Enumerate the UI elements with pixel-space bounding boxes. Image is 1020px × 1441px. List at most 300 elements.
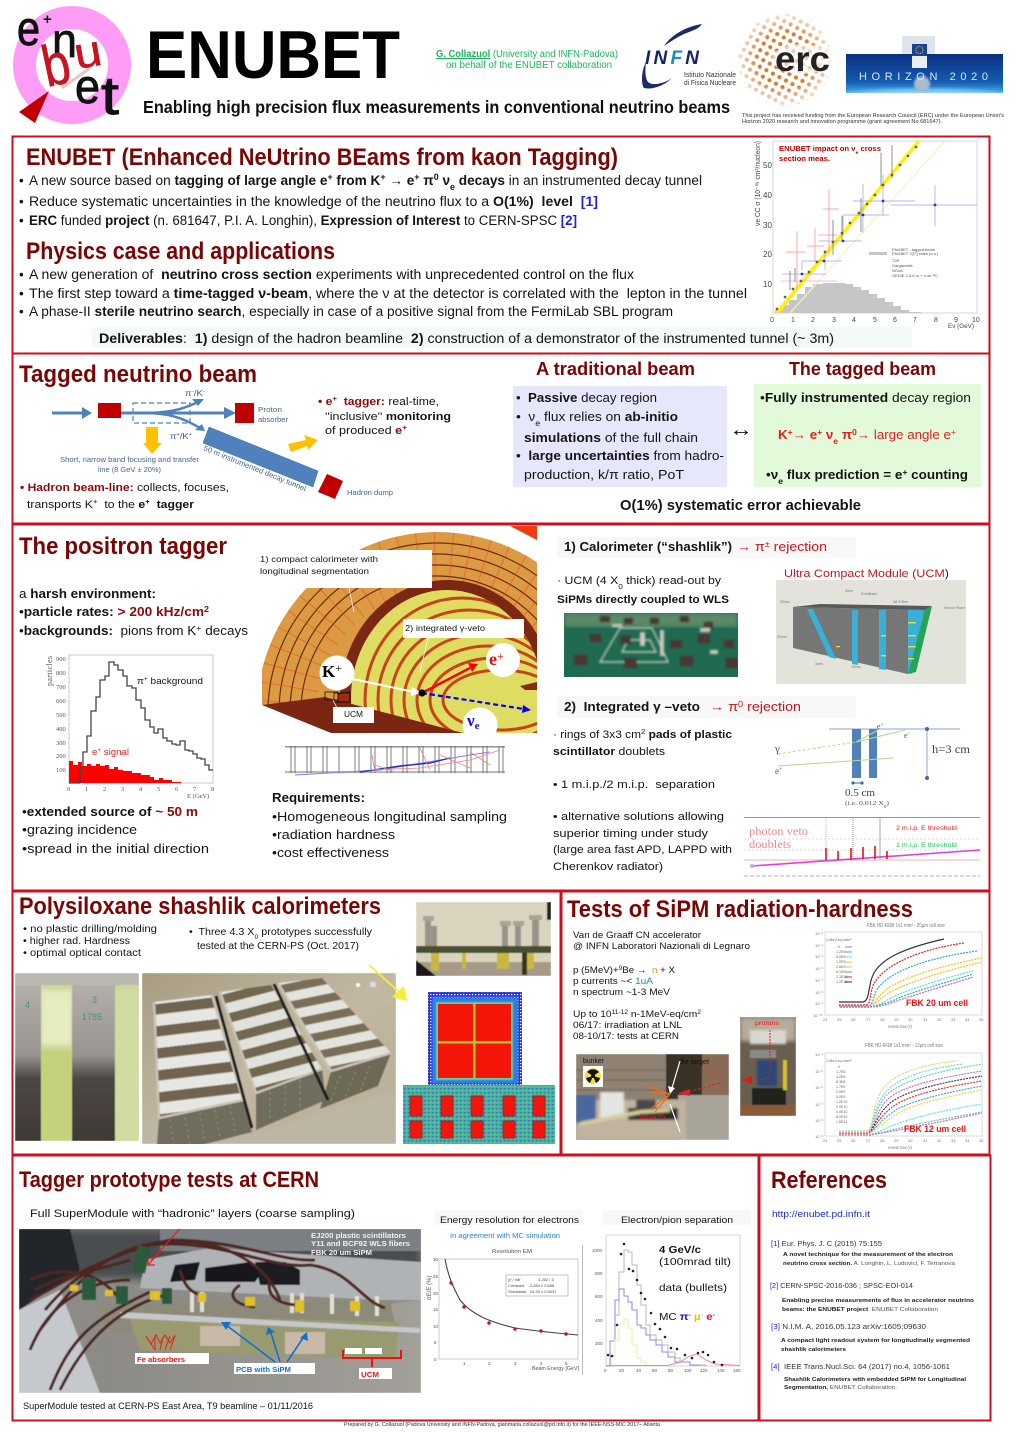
- logo: ENUBET: b: [36, 31, 76, 100]
- funding note: This project has received funding from the European Research Council (ERC) under the European Union's: [742, 113, 1004, 119]
- chart: FBK 20 um cell: 26: [851, 1017, 856, 1022]
- bullet list: project: •: [19, 213, 24, 228]
- chart: FBK 12 um cell: 0: [838, 1065, 840, 1069]
- heading: Tagged neutrino beam: [19, 361, 257, 388]
- chart: electron pion separation: 800: [595, 1271, 603, 1276]
- reference 2: [770, 1283, 975, 1313]
- label: UCM: UCM: [344, 710, 363, 719]
- text: veto description: • 1 m.i.p./2 m.i.p. separation: [553, 779, 715, 791]
- logo: ENUBET: e: [75, 61, 100, 114]
- logo: ERC: [735, 12, 835, 108]
- box: traditional beam: production, k/π ratio, PoT: [524, 468, 684, 482]
- photo: protons beam line: [740, 1017, 796, 1116]
- panel: polysiloxane calorimeters: [12, 892, 560, 1157]
- chart: FBK 20 um cell: 34: [965, 1017, 970, 1022]
- photo: scintillator tiles: [15, 973, 139, 1141]
- photo: SuperModule: FBK 20 um SiPM: [311, 1248, 372, 1257]
- decay arrows: [320, 643, 531, 732]
- subheading: gamma veto: [557, 696, 856, 718]
- panel: positron tagger: [12, 524, 990, 892]
- heading: The positron tagger: [19, 533, 227, 560]
- chart: particle energy histogram: 800: [56, 670, 66, 677]
- chart: FBK 12 um cell: 1.7E8: [836, 1070, 845, 1074]
- box: traditional beam: • large uncertainties from hadro-: [516, 449, 724, 463]
- chart: FBK 12 um cell: 34: [965, 1138, 970, 1143]
- text: irradiation setup: Van de Graaff CN accelerator: [573, 930, 701, 940]
- text: harsh environment: •particle rates: > 200 kHz/cm 2: [19, 604, 210, 619]
- chart: FBK 20 um cell: 1.2E11: [836, 980, 847, 984]
- reference 4: [4] IEEE Trans.Nucl.Sci. 64 (2017) no.4, 1056-1061: [771, 1364, 950, 1371]
- chart: FBK 12 um cell: 10⁻⁵: [815, 1069, 824, 1074]
- chart: photon veto doublets signal: doublets: [749, 839, 792, 851]
- logo: ENUBET: t: [101, 66, 119, 126]
- chart: particle energy histogram: 1: [85, 786, 88, 793]
- bullet list: physics: The first step toward a time-tagged ν-beam , where the ν at the detector is correlated with the lepton in the tunnel: [29, 286, 747, 301]
- chart: FBK 12 um cell: 1.6E11: [836, 1120, 847, 1124]
- heading: tagged beam: The tagged beam: [789, 358, 936, 379]
- chart: cross section vs energy: Eν (GeV): [948, 323, 974, 330]
- chart: FBK 12 um cell: 30: [908, 1138, 913, 1143]
- panel: introduction: [12, 136, 990, 354]
- label: integrated veto: 2) integrated γ-veto: [405, 623, 485, 633]
- decay arrows: e: [489, 649, 497, 669]
- chart: cross section vs energy: section meas.: [779, 154, 830, 163]
- chart: cross section vs energy: 8: [934, 317, 938, 324]
- text: veto description: superior timing under study: [553, 828, 708, 840]
- text: UCM readout: SiPMs directly coupled to WLS: [557, 594, 730, 606]
- chart: particle energy histogram: π+ background: [137, 676, 203, 687]
- chart: FBK 12 um cell: 29: [894, 1138, 899, 1143]
- chart: FBK 20 um cell: 1.2E9: [836, 960, 845, 964]
- chart: FBK 20 um cell: 6.1E9: [836, 970, 845, 974]
- illustration: Ultra Compact Module: 3mm: [845, 589, 853, 593]
- chart: photon veto doublets signal: [744, 818, 980, 876]
- diagram: photon veto doublet: γ: [774, 743, 780, 755]
- bullet list: project: Reduce systematic uncertainties in the knowledge of the neutrino flux to a O(1%) level [1]: [29, 194, 598, 209]
- bullet list: advantages: [23, 924, 157, 959]
- panel: references: [760, 1156, 990, 1420]
- deliverables box: [92, 327, 912, 348]
- reference 1: [771, 1241, 956, 1267]
- text: irradiation setup: Up to 10 11-12 n-1MeV-eq/cm 2: [573, 1009, 702, 1019]
- chart: particle energy histogram: [45, 655, 214, 800]
- diagram: photon veto doublet: h=3 cm: [932, 742, 971, 756]
- beamline diagram: absorber: [258, 415, 289, 424]
- text: prototypes: [189, 927, 372, 952]
- chart: FBK 12 um cell: 33: [951, 1138, 956, 1143]
- chart: particle energy histogram: 400: [56, 726, 66, 733]
- chart: particle energy histogram: 8: [211, 786, 214, 793]
- chart: electron pion separation: 80: [668, 1368, 674, 1373]
- logo: ERC: erc: [775, 40, 830, 79]
- chart: cross section vs energy: 4: [852, 317, 856, 324]
- text: prototypes: • Three 4.3 X 0 prototypes successfully: [189, 927, 372, 940]
- chart: FBK 12 um cell: 35: [979, 1138, 984, 1143]
- chart: FBK 20 um cell: 31: [923, 1017, 928, 1022]
- box: traditional beam: • Passive decay region: [516, 391, 657, 405]
- illustration: Ultra Compact Module: [776, 580, 966, 684]
- chart: electron pion separation: 140: [717, 1368, 725, 1373]
- heading: electron pion separation: [603, 1210, 751, 1225]
- heading: Polysiloxane shashlik calorimeters: [19, 893, 381, 920]
- chart: electron pion separation: (100mrad tilt): [659, 1257, 731, 1268]
- subheading: calorimeter: 1) Calorimeter (“shashlik”): [564, 540, 732, 554]
- text: e+ tagger: [318, 394, 451, 437]
- label: compact calorimeter: longitudinal segmentation: [260, 566, 369, 576]
- bullet list: project: ERC funded project (n. 681647, P.I. A. Longhin), Expression of Interest to CERN-SPSC [2]: [29, 213, 577, 228]
- text: source properties: [22, 805, 209, 856]
- box: tagged beam: K+→ e+ νe π0→ large angle e +: [778, 428, 956, 446]
- chart: particle energy histogram: 900: [56, 656, 66, 663]
- text: veto description: [553, 726, 732, 873]
- text: harsh environment: •backgrounds: pions from K + decays: [19, 624, 248, 638]
- box: traditional beam: [513, 386, 727, 487]
- text: veto description: Cherenkov radiator): [553, 861, 663, 873]
- text: source properties: •spread in the initial direction: [22, 842, 209, 856]
- text: source properties: •grazing incidence: [22, 823, 137, 837]
- funding note: Horizon 2020 research and innovation programme (grant agreement No 681647).: [742, 119, 942, 125]
- chart: particle energy histogram: 7: [193, 786, 197, 793]
- chart: energy resolution: 30: [433, 1257, 439, 1262]
- chart: electron pion separation: 160: [733, 1368, 741, 1373]
- illustration: Ultra Compact Module: 3mm: [815, 662, 823, 666]
- chart: energy resolution: 5: [565, 1361, 568, 1366]
- logo: INFN: [642, 24, 736, 89]
- text: hadron beam-line: [20, 482, 229, 511]
- chart: cross section vs energy: 3: [832, 317, 836, 324]
- heading: physics case: Physics case and applications: [26, 238, 335, 265]
- heading: Tests of SiPM radiation-hardness: [567, 896, 913, 923]
- chart: FBK 12 um cell: 28: [880, 1138, 885, 1143]
- heading: electron pion separation: Electron/pion separation: [621, 1215, 733, 1225]
- chart: FBK 20 um cell: 25: [837, 1017, 842, 1022]
- chart: particle energy histogram: 500: [56, 712, 66, 719]
- chart: electron pion separation: [592, 1235, 741, 1373]
- text: hadron beam-line: transports K + to the e+ tagger: [27, 496, 195, 511]
- chart: electron pion separation: 400: [595, 1318, 603, 1323]
- reference 1: A novel technique for the measurement of the electron: [783, 1252, 954, 1258]
- chart: FBK 12 um cell: 4.0E10: [836, 1110, 847, 1114]
- beamline diagram: π-/K-: [185, 388, 205, 398]
- chart: energy resolution: 5: [434, 1340, 437, 1345]
- reference 1: neutrino cross section. A. Longhin, L. Ludovici, F. Terranova: [783, 1261, 956, 1267]
- text: veto description: (large area fast APD, LAPPD with: [553, 844, 732, 856]
- subheading: calorimeter: → π ± rejection: [737, 540, 827, 554]
- illustration: Ultra Compact Module: 30mm: [780, 600, 790, 604]
- beamline diagram: line (8 GeV ± 20%): [98, 465, 161, 474]
- text: veto description: • alternative solutions allowing: [553, 811, 724, 823]
- photo: bunker: Sensor (?): [639, 1114, 665, 1121]
- chart: cross section vs energy: 2: [811, 317, 815, 324]
- arrow: to beam map: [369, 965, 407, 1001]
- chart: cross section vs energy: νe CC σ (10⁻³⁹ cm²/nucleon): [755, 141, 762, 226]
- chart: FBK 12 um cell: 32: [937, 1138, 942, 1143]
- beamline diagram: Hadron dump: [347, 488, 393, 497]
- reference 2: [2] CERN-SPSC-2016-036 ; SPSC-EOI-014: [770, 1283, 913, 1290]
- chart: FBK 20 um cell: 1-MeV-eq n/cm²: [826, 938, 852, 942]
- chart: FBK 20 um cell: 10⁻⁶: [815, 966, 824, 971]
- chart: FBK 20 um cell: reverse bias (V): [888, 1024, 912, 1029]
- chart: FBK 12 um cell: 10⁻⁶: [815, 1085, 824, 1090]
- text: irradiation setup: @ INFN Laboratori Nazionali di Legnaro: [573, 941, 750, 951]
- chart: FBK 12 um cell: FBK 12 um cell: [904, 1124, 966, 1134]
- box: tagged beam: [754, 384, 981, 487]
- chart: cross section vs energy: 6: [893, 317, 897, 324]
- text: irradiation setup: 06/17: irradiation at LNL: [573, 1020, 682, 1030]
- logo: ENUBET: u: [70, 26, 105, 79]
- chart: cross section vs energy: 10: [972, 317, 980, 324]
- text: hadron beam-line: • Hadron beam-line: collects, focuses,: [20, 482, 229, 494]
- logo: ENUBET: +: [43, 11, 52, 28]
- chart: FBK 20 um cell: 10⁻⁸: [815, 990, 824, 995]
- photo: SuperModule: [19, 1223, 421, 1393]
- chart: electron pion separation: 4 GeV/c: [659, 1245, 701, 1256]
- photo: bunker: bunker: [583, 1058, 605, 1065]
- chart: FBK 20 um cell: 10⁻⁵: [815, 954, 824, 959]
- heading: energy resolution: [435, 1210, 583, 1225]
- photo: bunker: [576, 1054, 729, 1140]
- beamline diagram: 50 m instrumented decay tunnel: [202, 444, 308, 493]
- bullet list: project: •: [19, 173, 24, 188]
- chart: FBK 12 um cell: 8.0E10: [836, 1115, 847, 1119]
- diagram: photon veto doublet: e-: [904, 731, 910, 740]
- chart: cross section vs energy: 9: [954, 317, 958, 324]
- chart: FBK 20 um cell: 10⁻⁴: [815, 943, 824, 948]
- bullet list: physics: •: [19, 267, 24, 282]
- bullet list: physics: A phase-II sterile neutrino search, especially in case of a positive signal from the FermiLab SBL program: [29, 304, 673, 319]
- chart: FBK 12 um cell: reverse bias (V): [888, 1145, 912, 1150]
- chart: cross section vs energy: GENIE 2.8.6 νₑ + n on ¹²C: [892, 273, 938, 278]
- logo: INFN: Istituto Nazionale: [684, 72, 736, 79]
- chart: FBK 20 um cell: 10⁻⁹: [815, 1001, 824, 1006]
- chart: particle energy histogram: 3: [121, 786, 124, 793]
- funding note: [742, 113, 1004, 125]
- decay arrows: ν: [467, 711, 475, 730]
- bullet list: project: A new source based on tagging of large angle e+ from K+ → e+ π0 νe decays in an instrumented decay tunnel: [29, 172, 702, 192]
- logo: INFN: INFN: [645, 48, 700, 69]
- box: traditional beam: • νe flux relies on ab-initio: [516, 410, 678, 428]
- chart: energy resolution: [427, 1249, 579, 1372]
- reference 2: Enabling precise measurements of flux in accelerator neutrino: [782, 1298, 975, 1304]
- authors: G. Collazuol (University and INFN-Padova): [436, 49, 618, 60]
- chart: particle energy histogram: 6: [175, 786, 179, 793]
- heat map: module efficiency: [428, 992, 522, 1089]
- arrow: versus: ↔: [729, 419, 753, 441]
- chart: particle energy histogram: 100: [56, 767, 66, 774]
- chart: FBK 12 um cell: 25: [837, 1138, 842, 1143]
- chart: FBK 12 um cell: 8.3E8: [836, 1080, 845, 1084]
- photo: bunker: Be target: [680, 1059, 709, 1066]
- authors: on behalf of the ENUBET collaboration: [446, 60, 612, 71]
- chart: electron pion separation: MC π- µ- e-: [659, 1312, 715, 1323]
- chart: energy resolution: 2: [488, 1361, 491, 1366]
- chart: FBK 20 um cell: 32: [937, 1017, 942, 1022]
- chart: FBK 20 um cell: 5.0E9: [836, 955, 845, 959]
- chart: FBK 12 um cell: 1.7E9: [836, 1085, 845, 1089]
- chart: particle energy histogram: 300: [56, 740, 66, 747]
- caption: supermodule: Full SuperModule with “hadronic” layers (coarse sampling): [30, 1208, 355, 1220]
- subheading: gamma veto: 2) Integrated γ –veto: [564, 700, 700, 714]
- beamline diagram: π+/K+: [170, 431, 192, 441]
- chart: electron pion separation: data (bullets): [659, 1283, 727, 1294]
- text: irradiation setup: p currents ~< 1uA: [573, 976, 654, 986]
- chart: cross section vs energy: [755, 141, 980, 330]
- decay arrows: e: [475, 720, 480, 732]
- photo: scintillator tiles: 1785: [82, 1012, 102, 1022]
- chart: cross section vs energy: 20: [763, 250, 772, 259]
- reference 3: A compact light readout system for longitudinally segmented: [781, 1338, 970, 1344]
- chart: FBK 20 um cell: 27: [866, 1017, 871, 1022]
- logo: Horizon 2020: [846, 36, 1003, 93]
- label: integrated veto: [403, 619, 524, 638]
- chart: FBK 12 um cell: 1-MeV-eq n/cm²: [826, 1059, 852, 1063]
- decay arrows: +: [497, 649, 504, 663]
- diagram: photon veto doublet: 0.5 cm: [845, 788, 875, 799]
- note: MC agreement: In agreement with MC simulation: [450, 1231, 560, 1240]
- text: requirements: [272, 791, 507, 860]
- heading: Tagger prototype tests at CERN: [19, 1167, 319, 1192]
- chart: cross section vs energy: 40: [763, 191, 772, 200]
- logo: Horizon 2020: HORIZON 2020: [859, 71, 988, 83]
- bullet list: physics: [19, 267, 747, 319]
- text: veto description: · rings of 3x3 cm 2 pads of plastic: [553, 726, 732, 741]
- chart: FBK 12 um cell: 10⁻⁸: [815, 1118, 824, 1123]
- chart: energy resolution: 20: [433, 1291, 439, 1296]
- text: requirements: •cost effectiveness: [272, 846, 389, 860]
- beamline diagram: [52, 388, 393, 499]
- chart: FBK 12 um cell: 10⁻⁹: [815, 1134, 824, 1139]
- chart: particle energy histogram: particles: [45, 656, 54, 686]
- chart: energy resolution: 10: [433, 1324, 439, 1329]
- reference 3: [3] N.I.M. A, 2016.05.123 arXiv:1605:09630: [771, 1324, 926, 1331]
- illustration: Ultra Compact Module: 30mm: [777, 635, 787, 639]
- chart: FBK 20 um cell: 24: [823, 1017, 828, 1022]
- reference 4: Shashlik Calorimeters with embedded SiPM for Longitudinal: [784, 1377, 966, 1383]
- chart: photon veto doublets signal: photon veto: [749, 826, 808, 838]
- chart: electron pion separation: 40: [636, 1368, 642, 1373]
- chart: particle energy histogram: 4: [139, 786, 143, 793]
- chart: particle energy histogram: e+ signal: [92, 746, 129, 758]
- chart: photon veto doublets signal: 1 m.i.p. E threshold: [896, 842, 957, 849]
- text: harsh environment: a harsh environment:: [19, 587, 156, 601]
- deliverables box: Deliverables : 1) design of the hadron beamline 2) construction of a demonstrator of the instrumented tunnel (~ 3m): [99, 331, 834, 346]
- title: ENUBET: [146, 17, 400, 93]
- heat map: tile hits: [403, 1085, 555, 1144]
- logo: INFN: di Fisica Nucleare: [684, 80, 736, 87]
- chart: FBK 20 um cell: 10⁻³: [815, 931, 824, 936]
- chart: FBK 12 um cell: 26: [851, 1138, 856, 1143]
- text: UCM readout: · UCM (4 X 0 thick) read-out by: [557, 575, 721, 590]
- chart: cross section vs energy: 5: [873, 317, 877, 324]
- logo: ENUBET: e: [17, 3, 40, 56]
- reference 3: [771, 1324, 970, 1353]
- label: Fe absorbers: Fe absorbers: [137, 1355, 185, 1364]
- box: tagged beam: •νe flux prediction = e + counting: [766, 468, 968, 486]
- chart: FBK 12 um cell: 10⁻⁷: [815, 1102, 824, 1107]
- label: PCB with SiPM: PCB with SiPM: [236, 1365, 291, 1374]
- beamline diagram: Proton: [258, 405, 282, 414]
- text: harsh environment: [19, 587, 248, 638]
- label: Fe absorbers: [135, 1353, 209, 1364]
- chart: cross section vs energy: 50: [763, 161, 772, 170]
- chart: cross section vs energy: ENUBET - tagged beam: [892, 247, 936, 252]
- photo: fibers and screws: [416, 902, 551, 976]
- decay arrows: +: [335, 661, 342, 675]
- diagram: photon veto doublet: [774, 722, 971, 808]
- chart: energy resolution: 4: [540, 1361, 543, 1366]
- text: requirements: Requirements:: [272, 791, 365, 805]
- chart: FBK 12 um cell: 5.0E9: [836, 1095, 845, 1099]
- bullet list: advantages: • optimal optical contact: [23, 948, 141, 959]
- conclusion: O(1%) systematic error achievable: [620, 497, 861, 514]
- chart: FBK 12 um cell: 27: [866, 1138, 871, 1143]
- text: e+ tagger: • e+ tagger: real-time,: [318, 394, 439, 408]
- text: e+ tagger: of produced e+: [325, 422, 407, 437]
- chart: cross section vs energy: ENUBET impact on ν e cross: [779, 144, 881, 156]
- heading: ENUBET: ENUBET (Enhanced NeUtrino BEams from kaon Tagging): [26, 144, 618, 171]
- chart: energy resolution: χ² / ndf 4.252 / 3: [508, 1277, 554, 1282]
- panel: SiPM radiation hardness: [562, 892, 990, 1154]
- text: irradiation setup: 08-10/17: tests at CERN: [573, 1031, 679, 1041]
- text: source properties: •extended source of ~ 50 m: [22, 805, 198, 819]
- chart: electron pion separation: 120: [700, 1368, 708, 1373]
- chart: particle energy histogram: 2: [103, 786, 106, 793]
- text: requirements: •Homogeneous longitudinal sampling: [272, 810, 507, 824]
- box: traditional beam: simulations of the full chain: [524, 431, 698, 445]
- photo: SuperModule: EJ200 plastic scintillators: [311, 1231, 406, 1240]
- illustration: Ultra Compact Module: Scintillator: [861, 592, 878, 596]
- chart: particle energy histogram: 200: [56, 753, 66, 760]
- illustration: shower event display: [285, 746, 505, 775]
- chart: FBK 20 um cell: 10⁻¹⁰: [813, 1013, 823, 1018]
- text: e+ tagger: ''inclusive'' monitoring: [325, 411, 451, 423]
- text: irradiation setup: [573, 930, 750, 1041]
- chart: electron pion separation: 200: [595, 1341, 603, 1346]
- subheading: calorimeter: [557, 537, 856, 558]
- text: veto description: scintillator doublets: [553, 746, 665, 758]
- chart: FBK 20 um cell: 0: [838, 945, 840, 949]
- photo: SiPM board: [564, 613, 738, 677]
- text: UCM readout: [557, 575, 730, 606]
- chart: particle energy histogram: 700: [56, 684, 66, 691]
- module title: Ultra Compact Module (UCM ): [784, 568, 949, 580]
- label: UCM: [359, 1368, 392, 1379]
- chart: cross section vs energy: T2K: [892, 258, 900, 263]
- chart: cross section vs energy: 10: [763, 280, 772, 289]
- text: irradiation setup: n spectrum ~1-3 MeV: [573, 987, 671, 997]
- authors: [436, 49, 618, 71]
- footer credit: Prepared by G. Collazuol (Padova University and INFN-Padova, gianmaria.collazuol@pd.infn.it) for the IEEE-NSS-MIC 2017– Atlanta: [344, 1422, 660, 1428]
- text: prototypes: tested at the CERN-PS (Oct. 2017): [197, 941, 359, 952]
- chart: FBK 12 um cell: 4.2E8: [836, 1075, 845, 1079]
- bullet list: advantages: • higher rad. Hardness: [23, 936, 130, 947]
- chart: cross section vs energy: NOvA: [892, 268, 903, 273]
- chart: FBK 20 um cell: 1.2E9: [836, 950, 845, 954]
- chart: cross section vs energy: 1: [791, 317, 795, 324]
- label: UCM: UCM: [361, 1370, 379, 1379]
- chart: FBK 20 um cell: 2.6E9: [836, 965, 845, 969]
- chart: FBK 20 um cell: 30: [908, 1017, 913, 1022]
- chart: energy resolution: Resolution EM: [492, 1249, 532, 1255]
- decay arrows: K: [322, 662, 335, 681]
- box: tagged beam: •Fully instrumented decay region: [760, 391, 971, 405]
- subheading: gamma veto: → π 0 rejection: [710, 700, 801, 714]
- reference 1: [1] Eur. Phys. J. C (2015) 75:155: [771, 1241, 882, 1248]
- chart: electron pion separation: 60: [652, 1368, 658, 1373]
- panel: prototype tests at CERN: [12, 1156, 758, 1420]
- photo: protons beam line: protons: [755, 1020, 780, 1027]
- chart: FBK 12 um cell: 2.0E10: [836, 1105, 847, 1109]
